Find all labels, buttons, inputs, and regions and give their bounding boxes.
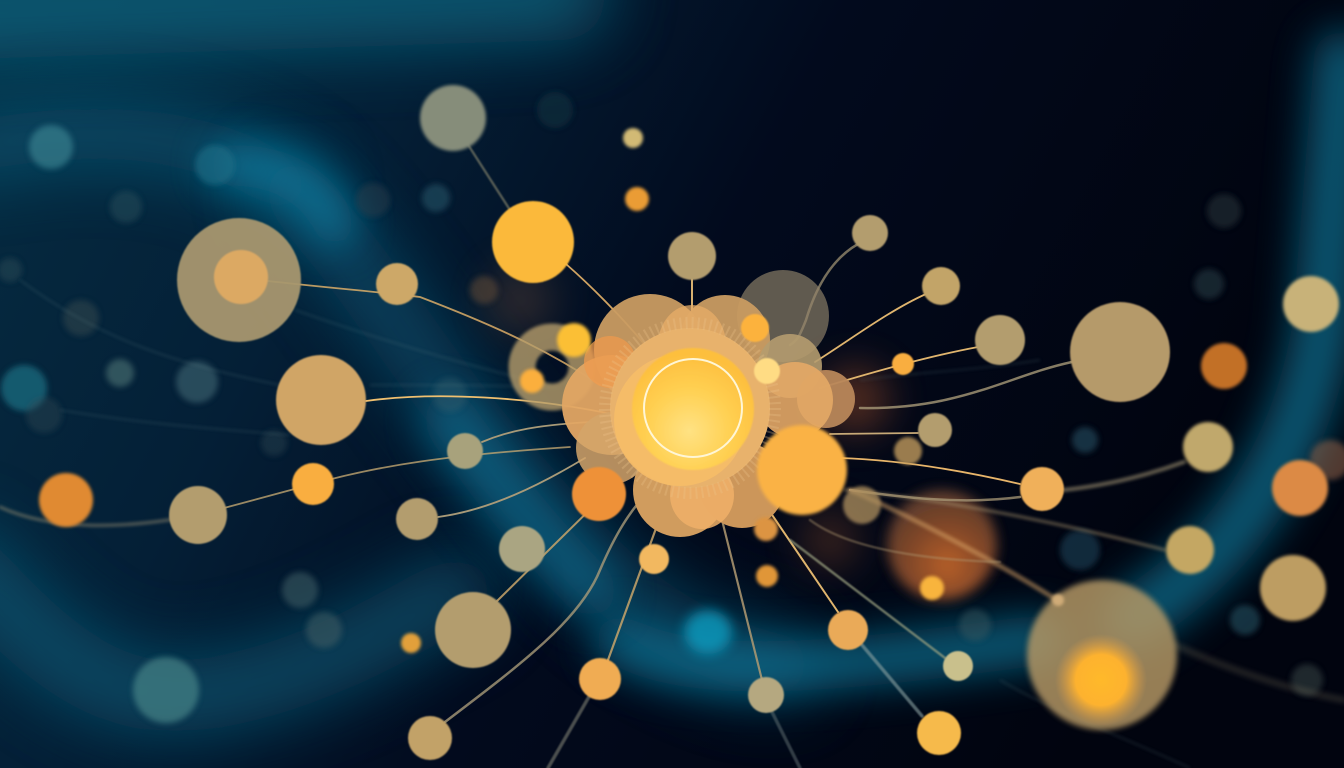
small soft orange nodes — [401, 128, 944, 653]
lower left node — [572, 467, 626, 521]
faint background links — [20, 280, 1190, 768]
soft blurred nodes — [39, 85, 1339, 621]
orange sphere lower right — [757, 425, 847, 515]
core ring — [644, 359, 742, 457]
central cluster — [520, 270, 855, 537]
radial ticks — [605, 323, 775, 493]
small cluster nodes — [557, 323, 591, 357]
bright orange nodes — [292, 201, 1064, 755]
background orange glows — [486, 266, 997, 600]
core disc — [632, 348, 754, 470]
pale inner disc — [610, 328, 770, 488]
cluster petals — [562, 270, 855, 537]
large left nodes — [177, 218, 366, 445]
tan nodes — [169, 215, 1170, 760]
large glowing node lower right — [1027, 580, 1177, 730]
left ring node — [522, 337, 582, 397]
